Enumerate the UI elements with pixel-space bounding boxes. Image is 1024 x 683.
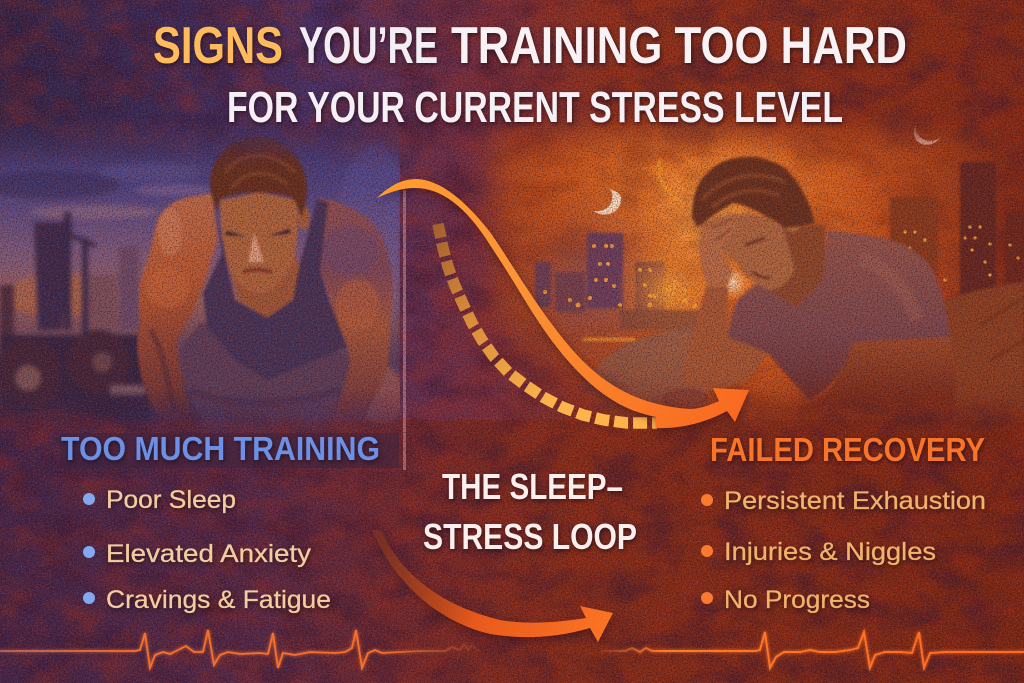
- night city backdrop: [475, 114, 1024, 421]
- title line 1: YOU’RE: [299, 17, 438, 75]
- item: elevated anxiety: Elevated Anxiety: [106, 540, 312, 568]
- divider line: [403, 190, 406, 470]
- heading: the sleep-stress loop: [423, 466, 637, 557]
- shorts: [184, 322, 350, 418]
- dashed arrow: [438, 224, 657, 423]
- neck: [760, 225, 825, 307]
- title line 1: [153, 17, 907, 75]
- title line 1: TRAINING TOO HARD: [451, 17, 907, 75]
- title line 1: SIGNS: [153, 17, 283, 75]
- hair: [210, 135, 307, 218]
- right arm resting: [797, 336, 954, 420]
- heartbeat line, right: [600, 632, 1024, 668]
- city lights: [543, 225, 1020, 308]
- heading: the sleep-stress loop: STRESS LOOP: [423, 516, 637, 557]
- heartbeat line, left: [0, 630, 480, 668]
- heading: failed recovery: FAILED RECOVERY: [710, 431, 985, 468]
- icon: crescent moon, centre: [594, 189, 621, 215]
- exhausted man figure: [662, 157, 955, 440]
- head and face: [220, 192, 298, 293]
- arm propping head: [683, 283, 768, 393]
- title line 2: FOR YOUR CURRENT STRESS LEVEL: [227, 83, 843, 132]
- item: poor sleep: Poor Sleep: [106, 486, 236, 514]
- tank top: [203, 200, 347, 380]
- lower curved arrow: [372, 530, 613, 642]
- shirt: [728, 230, 950, 400]
- item: persistent exhaustion: Persistent Exhaustion: [724, 487, 986, 515]
- main curved arrow: [377, 179, 749, 428]
- arm: athlete's right: [137, 193, 218, 435]
- panel: failed recovery list: [701, 431, 986, 614]
- athlete figure: [137, 135, 392, 435]
- chest skin: [230, 256, 301, 318]
- heading band: [60, 433, 399, 468]
- icon: crescent moon, right: [914, 124, 941, 145]
- heading: the sleep-stress loop: THE SLEEP–: [442, 466, 623, 507]
- panel: gym scene with athlete: [0, 130, 400, 432]
- item: injuries and niggles: Injuries & Niggles: [724, 538, 936, 566]
- title: [153, 17, 907, 132]
- ear: [785, 226, 800, 233]
- knee: [662, 388, 711, 408]
- heading: too much training: TOO MUCH TRAINING: [61, 430, 380, 467]
- head and face: [700, 214, 795, 290]
- item: no progress: No Progress: [724, 586, 870, 614]
- hair: [692, 157, 815, 228]
- hand on forehead: [699, 212, 737, 287]
- panel: too much training list: [60, 430, 399, 614]
- arm: athlete's left: [320, 198, 392, 435]
- item: cravings and fatigue: Cravings & Fatigue: [106, 586, 331, 614]
- panel: night scene with exhausted man: [475, 114, 1024, 421]
- gym backdrop: [0, 130, 400, 432]
